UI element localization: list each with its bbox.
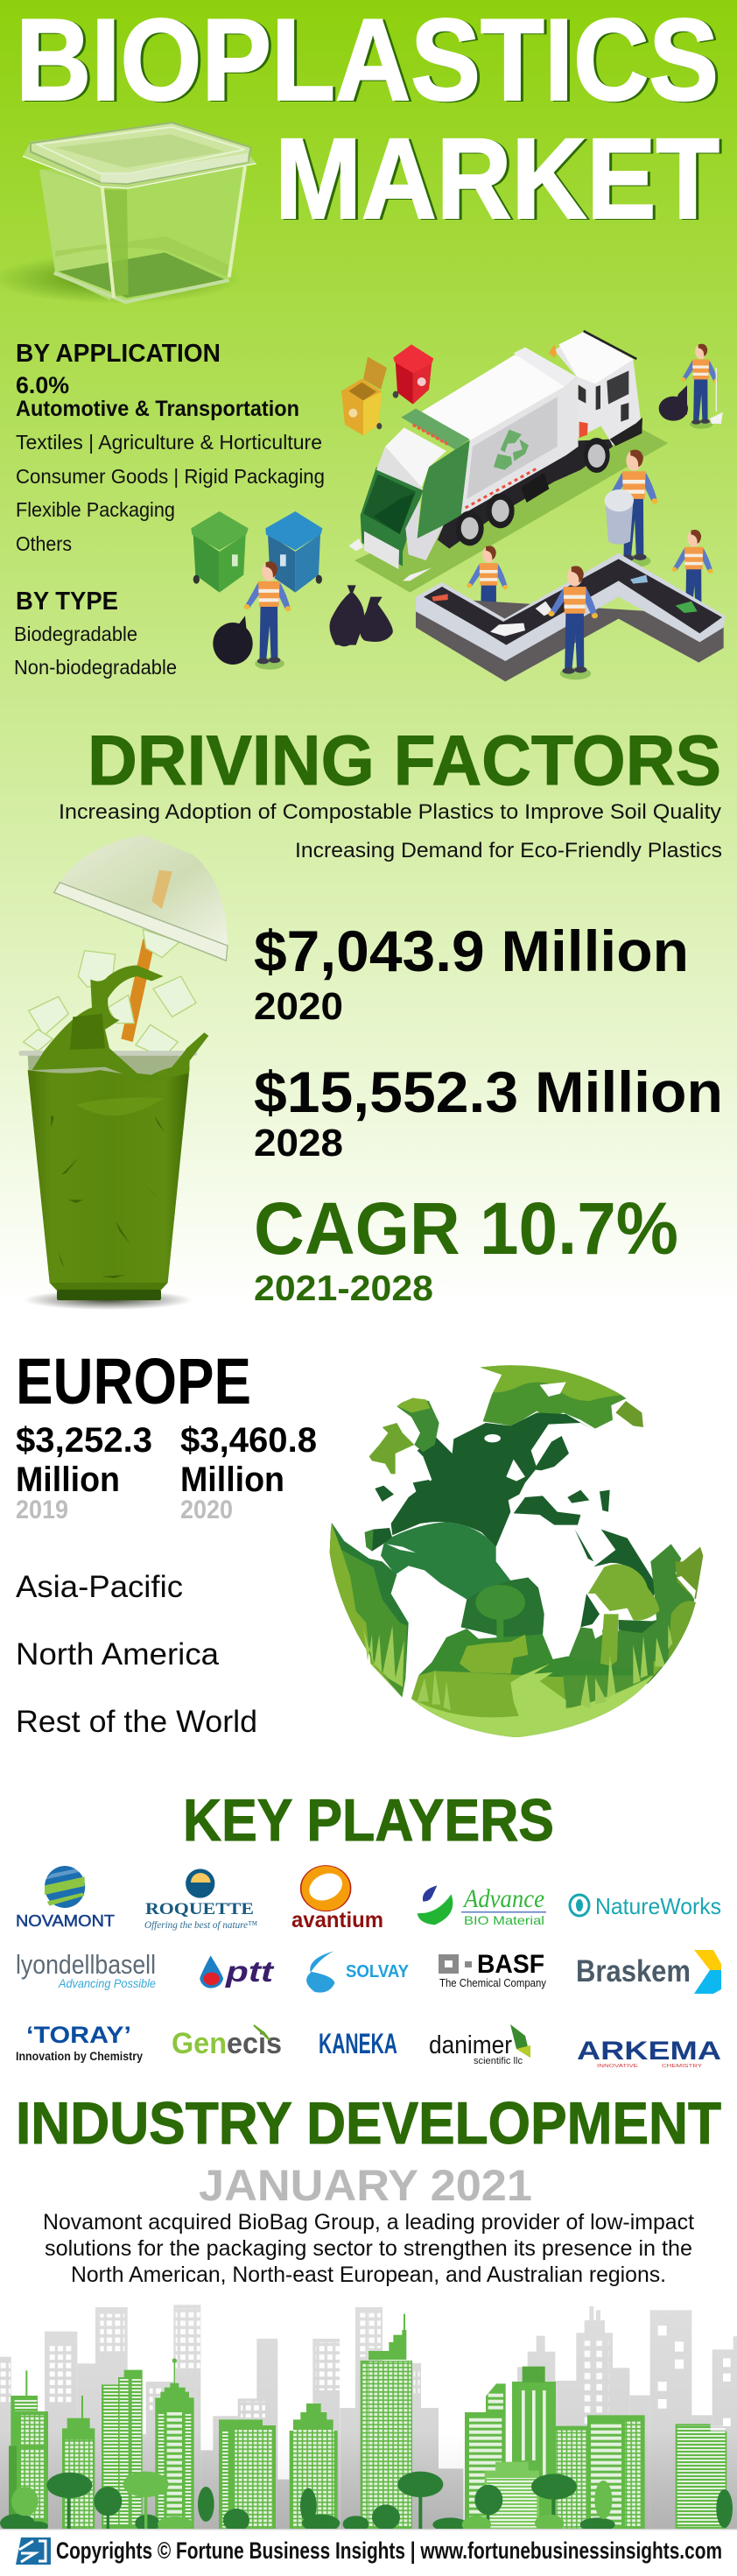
logo: Avantium	[291, 1866, 383, 1932]
gradient background	[0, 0, 737, 1305]
stat: Europe 2020: 2020	[180, 1496, 233, 1524]
heading: key players: KEY PLAYERS	[183, 1787, 554, 1854]
lower mass	[411, 1629, 654, 1737]
other regions: Rest of the World	[16, 1705, 257, 1739]
stat: 6.0% automotive: 6.0%	[16, 372, 69, 398]
red bin	[393, 344, 433, 405]
workers behind conveyor	[672, 530, 713, 624]
application list: Others	[16, 532, 72, 555]
logo: Toray: Innovation by Chemistry	[16, 2049, 143, 2063]
cow	[460, 1635, 528, 1674]
panel: by type: Biodegradable	[14, 623, 137, 645]
logo: Solvay: SOLVAY	[346, 1962, 410, 1981]
worker top right	[681, 344, 718, 429]
panel: regional	[16, 1345, 317, 1739]
yellow bin	[341, 356, 387, 435]
Atlantic ocean	[391, 1412, 593, 1547]
logo: Kaneka: KANEKA	[319, 2028, 397, 2059]
logo: Advance Bio Material: BIO Material	[464, 1913, 544, 1927]
stat: Europe 2019: $3,252.3	[16, 1421, 152, 1460]
stat: Europe 2020: $3,460.8	[180, 1421, 317, 1460]
logo: LyondellBasell	[16, 1949, 156, 1990]
logo: Roquette	[144, 1869, 257, 1931]
trees	[372, 2472, 733, 2531]
blue bin	[265, 511, 322, 593]
logo: Toray: ‘TORAY’	[26, 2022, 131, 2048]
logo: BASF	[439, 1950, 546, 1989]
stat: Europe 2019: 2019	[16, 1496, 68, 1524]
logo: Roquette: ROQUETTE	[145, 1900, 254, 1918]
stat: Europe 2020: Million	[180, 1460, 284, 1499]
rabbit	[510, 1664, 566, 1718]
bright ground	[411, 1675, 654, 1737]
panel: company logos	[16, 1866, 721, 2069]
grass	[418, 1624, 672, 1710]
conveyor	[416, 553, 725, 681]
Central Atlantic	[381, 1522, 544, 1637]
straw	[121, 939, 155, 1042]
illustration: green globe	[330, 1365, 703, 1737]
title	[16, 0, 719, 243]
logo: Toray	[16, 2022, 143, 2063]
logo: Braskem	[576, 1950, 721, 1994]
development description: solutions for the packaging sector to strengthen its presence in the	[45, 2236, 692, 2261]
logo: PTT: ptt	[225, 1955, 276, 1988]
other regions: Asia-Pacific	[16, 1570, 183, 1604]
illustration: garbage truck scene	[191, 331, 725, 681]
worker in front of conveyor	[548, 566, 598, 679]
illustration: green drink cup	[19, 835, 228, 1310]
panel: by type	[14, 588, 177, 679]
skyline right half	[368, 2306, 737, 2533]
logo: LyondellBasell: Advancing Possible	[58, 1976, 156, 1990]
footer	[0, 2529, 737, 2576]
ground shadow	[354, 429, 668, 593]
logo: Solvay	[306, 1951, 410, 1993]
logo: Danimer: danimer	[429, 2031, 512, 2059]
development description: Novamont acquired BioBag Group, a leading provider of low-impact	[43, 2210, 694, 2235]
skyline left half	[0, 2305, 369, 2532]
other regions: North America	[16, 1637, 220, 1672]
worker with bag	[244, 561, 291, 670]
driving factors text: Increasing Adoption of Compostable Plastics to Improve Soil Quality	[59, 800, 721, 824]
logo: BASF: The Chemical Company	[439, 1976, 546, 1989]
date: January 2021: JANUARY 2021	[199, 2161, 532, 2210]
right forest	[551, 1544, 694, 1684]
other regions	[16, 1570, 257, 1739]
logo: Advance Bio Material	[418, 1884, 546, 1927]
ice cubes	[24, 929, 196, 1058]
Europe seas	[514, 1490, 656, 1602]
logo: NatureWorks: NatureWorks	[595, 1893, 721, 1919]
stat: 2028 value	[254, 1059, 723, 1165]
application list: Textiles | Agriculture & Horticulture	[16, 431, 322, 454]
application list: Flexible Packaging	[16, 498, 175, 521]
green bin	[191, 511, 249, 593]
stat: 6.0% automotive	[16, 372, 299, 421]
application list	[16, 431, 325, 555]
logo: PTT	[200, 1955, 276, 1988]
Left forest band	[330, 1522, 409, 1697]
development description: North American, North-east European, and Australian regions.	[71, 2263, 666, 2287]
icon: Fortune Business Insights logo	[16, 2537, 51, 2565]
trees	[0, 2473, 369, 2532]
stat: CAGR: 2021-2028	[254, 1268, 433, 1308]
left bags	[213, 616, 253, 665]
logo: Novamont	[16, 1866, 115, 1930]
stat: 2028 value: $15,552.3 Million	[254, 1059, 723, 1124]
application list: Consumer Goods | Rigid Packaging	[16, 465, 325, 488]
logo: Novamont: NOVAMONT	[16, 1912, 115, 1930]
panel: by application	[16, 340, 325, 555]
logo: Arkema: INNOVATIVE	[597, 2064, 639, 2069]
logo: Danimer: scientific llc	[474, 2056, 523, 2066]
stat: Europe 2019	[16, 1421, 152, 1524]
logo: Avantium: avantium	[291, 1908, 383, 1932]
logo: Roquette: Offering the best of nature™	[144, 1918, 257, 1931]
stat: 2028 value: 2028	[254, 1122, 343, 1165]
logo: Genecis: Genecis	[172, 2027, 282, 2060]
logo: Danimer	[429, 2024, 530, 2066]
North American lands	[396, 1398, 439, 1452]
heading: driving factors: DRIVING FACTORS	[88, 721, 721, 800]
icon: plastic container	[0, 123, 256, 304]
panel: by type: Non-biodegradable	[14, 656, 177, 679]
market value stats	[254, 918, 723, 1308]
logo: Braskem: Braskem	[576, 1954, 691, 1988]
logo: Arkema: ARKEMA	[577, 2037, 721, 2066]
stat: CAGR	[254, 1187, 678, 1308]
garbage bags	[330, 385, 688, 646]
tree	[475, 1585, 525, 1620]
stat: Europe 2020	[180, 1421, 317, 1524]
panel: by type: BY TYPE	[16, 588, 118, 616]
cup	[28, 1054, 190, 1082]
stat: 6.0% automotive: Automotive & Transportation	[16, 397, 299, 421]
logo: Arkema: CHEMISTRY	[662, 2064, 703, 2069]
logo: BASF: BASF	[477, 1950, 544, 1979]
stat: 2020 value	[254, 918, 689, 1028]
driving factors text	[59, 800, 722, 862]
lid	[54, 835, 228, 961]
recycle symbol	[494, 430, 529, 470]
stat: 2020 value: $7,043.9 Million	[254, 918, 689, 983]
logo: LyondellBasell: lyondellbasell	[16, 1949, 156, 1980]
stat: Europe 2019: Million	[16, 1460, 120, 1499]
illustration: green city skyline	[0, 2305, 737, 2533]
driving factors text: Increasing Demand for Eco-Friendly Plastics	[295, 839, 722, 862]
development description	[43, 2210, 694, 2287]
worker with trash can	[607, 450, 658, 567]
stat: 2020 value: 2020	[254, 985, 343, 1028]
stat: CAGR: CAGR 10.7%	[254, 1187, 678, 1270]
arctic cap	[480, 1365, 628, 1429]
logo: Advance Bio Material: Advance	[462, 1884, 544, 1913]
heading: Europe: EUROPE	[16, 1345, 251, 1418]
truck body	[348, 331, 642, 581]
heading: by application: BY APPLICATION	[16, 340, 221, 368]
splash	[32, 965, 208, 1082]
